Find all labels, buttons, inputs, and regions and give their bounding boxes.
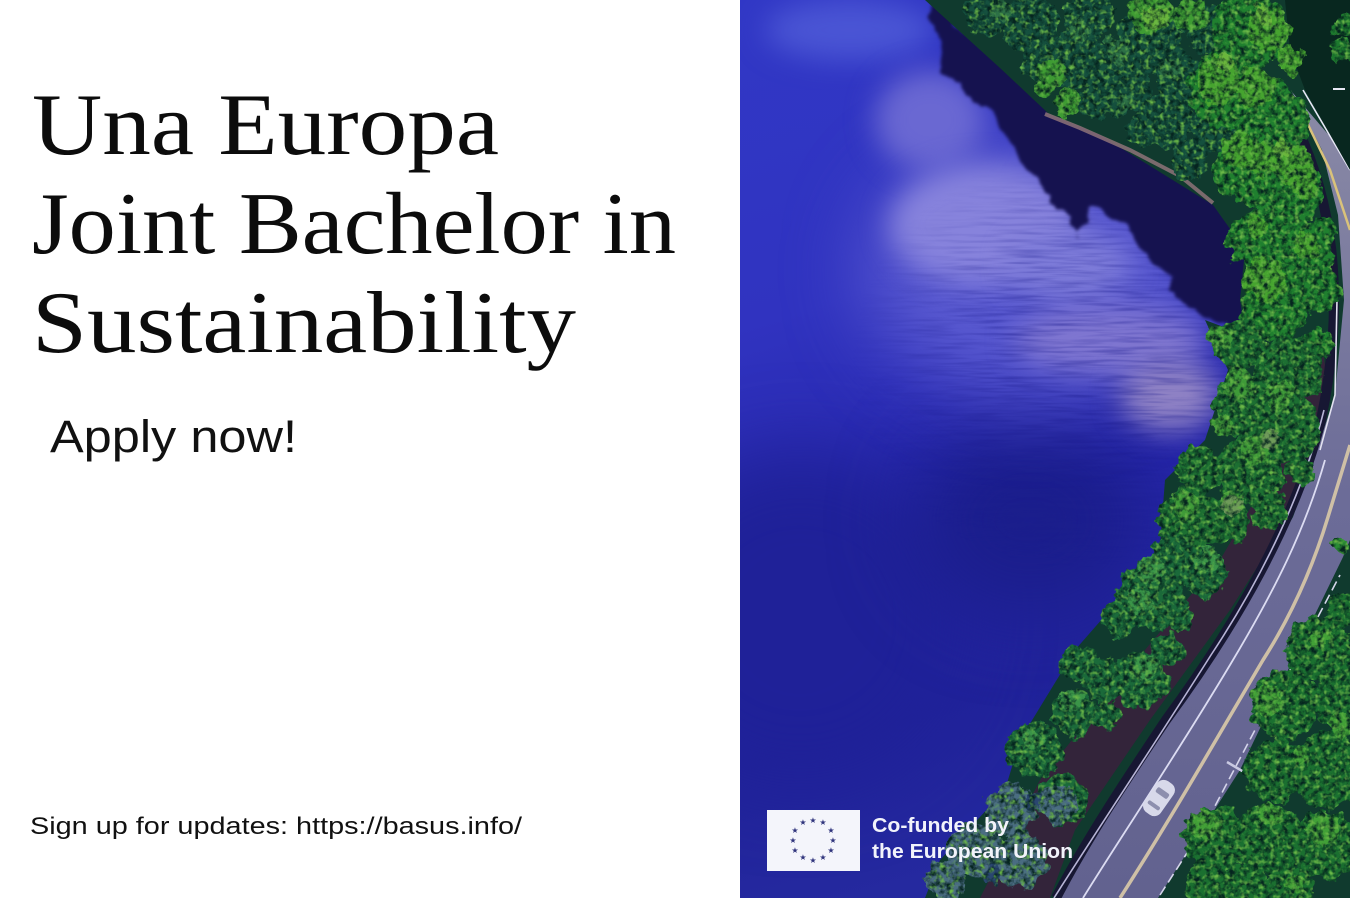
sign up link text: Sign up for updates: https://basus.info/ <box>30 813 522 840</box>
car on road <box>1143 780 1175 816</box>
trees behind label <box>925 784 1078 899</box>
ring of EU stars: ★ <box>799 853 807 862</box>
ring of EU stars: ★ <box>791 846 799 855</box>
background photo: lake, forest and road <box>740 0 1350 898</box>
brown ground beside road <box>980 330 1330 898</box>
ring of EU stars: ★ <box>819 818 827 827</box>
ring of EU stars: ★ <box>791 826 799 835</box>
land under the forest <box>925 0 1350 898</box>
ring of EU stars: ★ <box>829 836 837 845</box>
road <box>1054 90 1350 898</box>
dark conifers top <box>963 0 1239 180</box>
dark forest top right <box>1285 0 1350 170</box>
EU co-funding logo <box>767 810 1073 871</box>
forest trees <box>925 0 1350 899</box>
title: Joint Bachelor in <box>32 176 676 273</box>
ring of EU stars: ★ <box>819 853 827 862</box>
title <box>32 77 676 372</box>
co-funded text: the European Union <box>872 841 1073 863</box>
ring of EU stars: ★ <box>789 836 797 845</box>
apply now call to action: Apply now! <box>50 411 297 462</box>
lower shore trees <box>1007 534 1227 826</box>
dark forest reflection <box>926 4 1244 326</box>
street lamp top right <box>1333 88 1345 90</box>
ring of EU stars: ★ <box>799 818 807 827</box>
co-funded text <box>872 815 1073 863</box>
lake water <box>740 0 1229 898</box>
ring of EU stars <box>789 816 837 865</box>
ring of EU stars: ★ <box>809 856 817 865</box>
street lamp <box>1226 761 1243 772</box>
EU flag panel <box>767 810 860 871</box>
co-funded text: Co-funded by <box>872 815 1010 837</box>
ring of EU stars: ★ <box>809 816 817 825</box>
ring of EU stars: ★ <box>827 846 835 855</box>
title: Sustainability <box>32 275 576 372</box>
title: Una Europa <box>32 77 499 174</box>
ring of EU stars: ★ <box>827 826 835 835</box>
right edge trees <box>1329 14 1350 63</box>
sandy shoreline <box>1045 114 1213 203</box>
mid trees <box>1158 319 1324 552</box>
lower-right roadside line <box>1160 575 1340 895</box>
lower right trees <box>1183 592 1350 899</box>
bright trees top <box>1188 0 1340 361</box>
